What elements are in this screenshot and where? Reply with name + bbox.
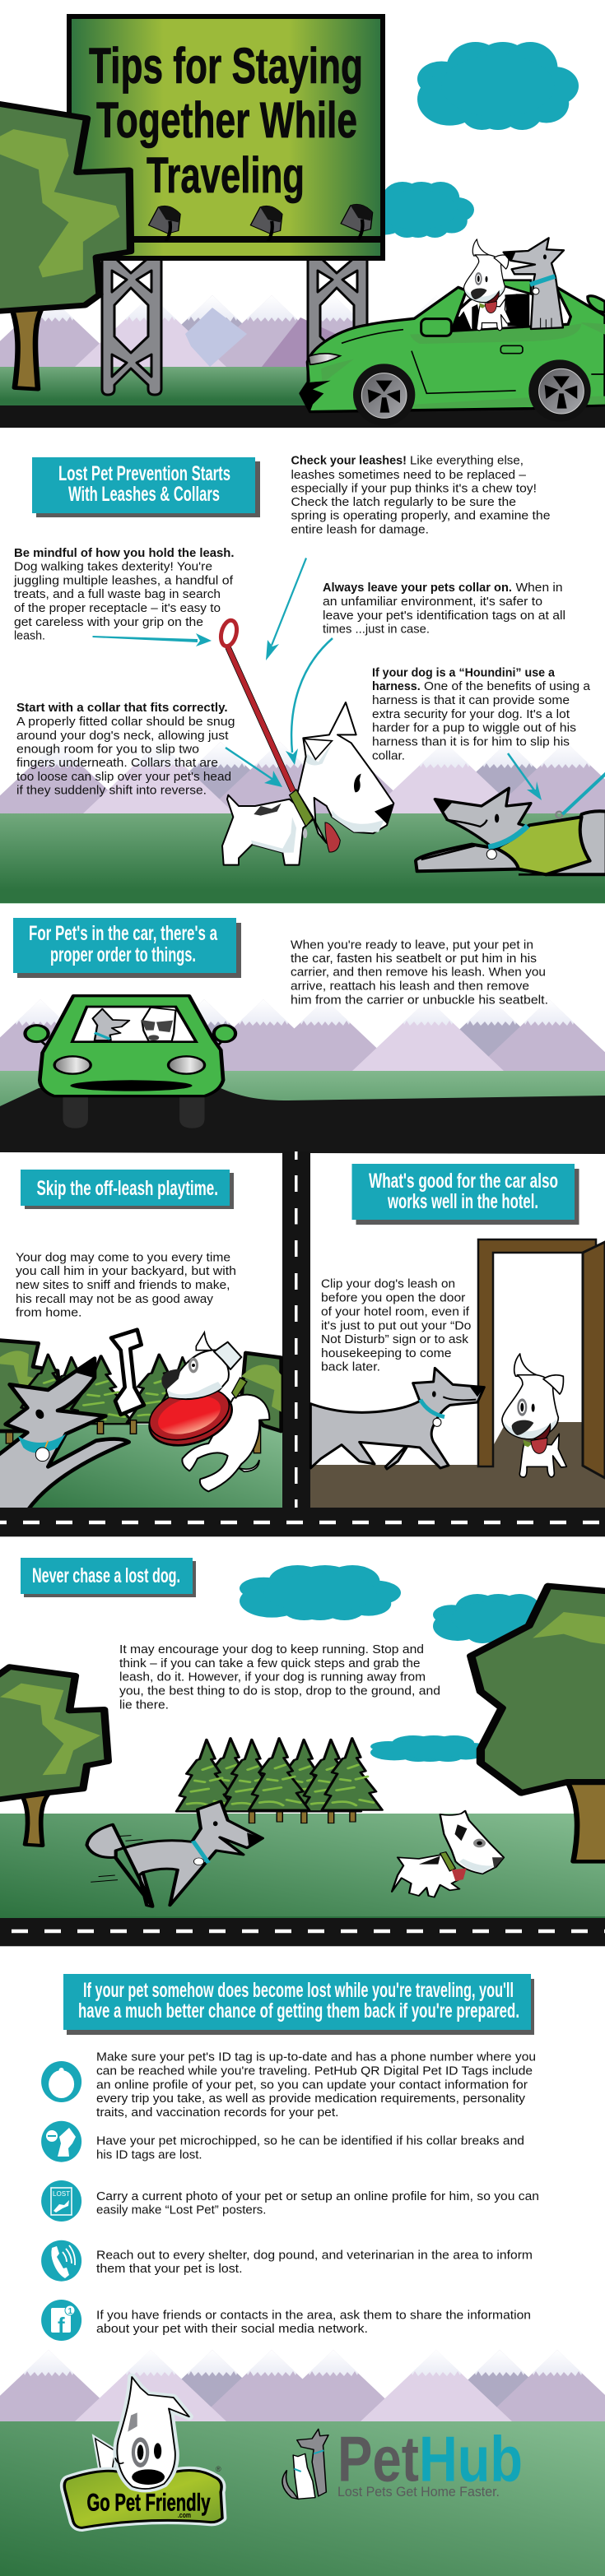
text: ID tag: every trip you take, as well as provide medication requirements, personality [96,2092,526,2106]
text: houndini harness: extra security for your dog. It's a lot [372,708,570,721]
road: horizontal lower [0,1508,605,1537]
text: collar fit: if they suddenly shift into reverse. [16,785,207,798]
lamps [149,204,373,241]
logo: Go Pet Friendly [64,2377,222,2527]
pine forest [176,1738,382,1823]
door handle [500,345,523,354]
cloud: behind sign [362,182,474,238]
tip: microchip [41,2121,524,2162]
dog: gray running [87,1801,263,1907]
grille [70,1080,193,1091]
tree left [0,1667,108,1846]
text: check your leashes: spring is operating properly, and examine the [291,510,550,523]
text: check your leashes: Like everything else, [410,455,524,468]
text: check your leashes [291,455,550,536]
section: leashes and collars [0,455,605,904]
arrow: to leash handle [92,633,212,646]
section: footer [0,2350,605,2576]
headlight [309,354,340,364]
text: clip leash [321,1278,471,1374]
car body [300,286,605,412]
cabin [453,281,570,331]
title: Traveling [147,147,305,203]
ground [0,1814,605,1916]
text: clip leash: before you open the door [321,1291,466,1304]
window [72,1007,196,1042]
billboard sign [69,16,383,258]
mountains [0,999,605,1071]
text: collar fit: too loose can slip over your pet's head [16,771,231,784]
door frame [478,1239,596,1466]
text: leave collar on: an unfamiliar environment, it's safer to [323,595,542,609]
title: Together While [96,92,357,148]
text: houndini harness: harness is that it can provide some [372,694,570,707]
heading: leashes and collars [32,457,260,517]
text: clip leash: it's just to put out your “Do [321,1319,471,1332]
arrow: to leash [266,558,307,660]
heading: never chase [21,1558,196,1597]
ground [0,813,605,903]
heading: proper order: proper order to things. [50,943,196,966]
badge [64,2470,222,2527]
text: leave collar on: times ...just in case. [323,623,430,637]
text: hold the leash: juggling multiple leashes, a handful of [13,574,234,587]
text: recall [16,1251,236,1320]
tip: shelters [41,2240,533,2282]
section: billboard hero scene [0,16,605,428]
text: social [96,2309,531,2336]
heading: skip off-leash [21,1170,234,1209]
text: ID tag [96,2051,536,2120]
heading: leashes and collars: With Leashes & Collars [68,483,220,506]
ground [0,2421,605,2576]
text: hold the leash: of the proper receptacle – it's easy to [14,602,221,615]
mirror [421,319,451,336]
dog: gray with harness [416,773,605,874]
text: photo: Carry a current photo of your pet or setup an online profile for him, so you can [96,2190,539,2203]
text: hold the leash: leash. [14,629,45,642]
logo: Go Pet Friendly: .com [178,2511,191,2519]
text: never chase [119,1643,440,1712]
dog head [117,2377,189,2489]
text: check your leashes: leashes sometimes need to be replaced – [291,469,527,482]
text: leave collar on [323,581,565,637]
text: check your leashes: entire leash for damage. [291,523,429,536]
mirrors [39,1039,224,1047]
road: lower divider [0,1918,605,1947]
tip: ID tag [41,2051,536,2120]
dog tail [95,2439,115,2472]
text: car order: arrive, reattach his leash and then remove [291,980,529,994]
heading: skip off-leash: Skip the off-leash playtime. [36,1177,218,1200]
ground [0,367,605,405]
text: shelters: them that your pet is lost. [96,2263,242,2276]
text: houndini harness: collar. [372,749,405,762]
icon: phone [41,2240,81,2282]
leash: red [218,619,293,791]
text: microchip: Have your pet microchipped, so he can be identified if his collar breaks and [96,2134,524,2147]
dog: white with frisbee [142,1332,269,1491]
text: ID tag: an online profile of your pet, so you can update your contact information for [96,2078,528,2092]
text: recall: from home. [16,1307,82,1320]
billboard post left [102,257,161,395]
panel: hotel [310,1164,605,1508]
spoiler [588,296,605,313]
text: never chase: you, the best thing to do is stop, drop to the ground, and [119,1685,440,1698]
dog: gray [504,238,564,329]
text: never chase: leash, do it. However, if your dog is running away from [119,1671,426,1684]
text: collar fit: around your dog's neck, allowing just [16,730,229,743]
text: check your leashes: Check your leashes! [291,455,407,468]
icon: facebook [41,2300,81,2341]
text: car order: carrier, and then remove his leash. When you [291,966,546,980]
arrow: to collar curved [286,638,333,765]
dog: white with collar [222,702,393,865]
text: photo [96,2190,539,2217]
text: shelters [96,2249,533,2276]
tip: social [41,2300,531,2341]
bone [111,1330,144,1415]
text: social: about your pet with their social media network. [96,2323,368,2336]
text: recall: his recall may not be as good away [16,1293,214,1306]
text: car order [291,938,548,1007]
heading: leashes and collars: Lost Pet Prevention Starts [58,462,230,485]
dog: spotted running [392,1811,504,1897]
text: houndini harness: If your dog is a “Houndini” use a [372,666,556,679]
ground [0,1071,605,1112]
text: never chase: It may encourage your dog to keep running. Stop and [119,1643,424,1656]
text: hold the leash: Dog walking takes dexterity! You're [14,561,212,574]
road: vertical divider [282,1151,310,1513]
headlights [54,1056,91,1074]
text: never chase: think – if you can take a few quick steps and grab the [119,1657,420,1670]
text: houndini harness: harness than it is for him to slip his [372,736,570,749]
text: houndini harness: One of the benefits of using a [424,680,591,693]
dog: gray in window [93,1009,129,1040]
icon: facebook: f [58,2313,65,2337]
logo: Go Pet Friendly: Go Pet Friendly [87,2490,211,2517]
text: ID tag: traits, and vaccination records for your pet. [96,2106,339,2120]
cloud: top right [417,42,579,130]
logo: PetHub: Hub [419,2423,523,2495]
text: collar fit [16,702,235,798]
heading: proper order [13,918,241,978]
text: houndini harness: harder for a pup to wiggle out of his [372,722,576,735]
dog: white with sunglasses [142,1008,175,1041]
section: if your pet becomes lost [41,1974,539,2341]
text: collar fit: fingers underneath. Collars that are [16,757,218,770]
text: check your leashes: especially if your pup thinks it's a chew toy! [291,482,537,495]
text: ID tag: can be reached while you're traveling. PetHub QR Digital Pet ID Tags include [96,2064,533,2078]
icon: facebook: 1 [67,2307,72,2316]
logo: PetHub: Lost Pets Get Home Faster. [337,2484,500,2500]
text: clip leash: back later. [321,1361,380,1374]
ground [0,1425,282,1508]
text: car order: him from the carrier or unbuckle his seatbelt. [291,994,548,1007]
tip: photo [41,2180,539,2222]
text: hold the leash: treats, and a full waste bag in search [14,588,221,601]
text: ID tag: Make sure your pet's ID tag is up-to-date and has a phone number where you [96,2051,536,2064]
floor [310,1465,605,1508]
text: collar fit: Start with a collar that fits correctly. [16,702,228,715]
icon: lost poster: LOST [53,2190,70,2198]
text: hold the leash: Be mindful of how you hold the leash. [14,547,234,560]
car: front view [25,996,235,1128]
clouds [240,1565,556,1762]
tree left [0,104,131,389]
arrow: to collar left [226,748,282,787]
heading: hotel [352,1164,579,1225]
dog: gray big [0,1359,129,1511]
billboard post right [308,257,367,395]
dog: white at door [502,1354,566,1477]
mini dogs [282,2429,328,2499]
text: never chase: lie there. [119,1698,169,1712]
text: hold the leash [13,547,234,642]
dog: gray walking [310,1368,484,1469]
text: microchip [96,2134,524,2161]
tree right [471,1586,605,1861]
icon: tag [41,2061,81,2102]
arrow: to harness [508,753,542,800]
door panel [583,1242,605,1478]
road [0,1088,605,1154]
text: recall: new sites to sniff and friends to make, [16,1279,230,1292]
text: collar fit: A properly fitted collar should be snug [16,716,235,729]
logo: PetHub [282,2423,523,2500]
text: car order: When you're ready to leave, put your pet in [291,938,533,952]
logo: Go Pet Friendly: ® [216,2465,221,2473]
heading: proper order: For Pet's in the car, there's a [29,922,218,945]
text: recall: you call him in your backyard, but with [16,1265,236,1278]
icon: dog and chip [41,2121,81,2162]
title: Tips for Staying [89,38,363,94]
text: social: If you have friends or contacts in the area, ask them to share the information [96,2309,531,2322]
green car with dogs [300,238,605,426]
heading: never chase: Never chase a lost dog. [32,1564,180,1587]
mountains [0,2350,605,2421]
text: leave collar on: leave your pet's identification tags on at all [323,609,565,623]
pines [18,1355,78,1423]
text: recall: Your dog may come to you every time [16,1251,230,1264]
text: microchip: his ID tags are lost. [96,2148,202,2161]
section: pets in the car [0,918,605,1154]
title [89,38,363,203]
text: collar fit: enough room for you to slip two [16,744,199,757]
body [40,996,223,1096]
scene: park play [0,1330,282,1511]
text: clip leash: Not Disturb” sign or to ask [321,1333,469,1346]
section: never chase [0,1558,605,1918]
text: clip leash: Clip your dog's leash on [321,1278,455,1291]
dog: white [464,239,511,331]
mountains [0,742,605,813]
text: car order: the car, fasten his seatbelt or put him in his [291,952,537,966]
panel: skip off-leash playtime [0,1170,282,1511]
text: clip leash: of your hotel room, even if [321,1305,470,1318]
wheels [353,359,591,426]
road [0,405,605,428]
mountains [0,295,605,367]
icon: lost poster [41,2180,81,2222]
logo: PetHub: Pet [337,2423,419,2495]
text: check your leashes: Check the latch regularly to be sure the [291,496,516,509]
text: hold the leash: get careless with your grip on the [14,616,203,629]
trees behind [6,1420,261,1453]
text: leave collar on: When in [515,581,563,595]
text: clip leash: housekeeping to come [321,1347,451,1360]
text: houndini harness: harness. [372,680,421,693]
text: houndini harness [372,666,591,762]
text: photo: easily make “Lost Pet” posters. [96,2204,267,2217]
text: shelters: Reach out to every shelter, dog pound, and veterinarian in the area to inform [96,2249,533,2262]
text: leave collar on: Always leave your pets collar on. [323,581,512,595]
wheels [63,1096,205,1128]
heading: prepared [63,1974,534,2035]
inner room floor [493,1422,583,1467]
